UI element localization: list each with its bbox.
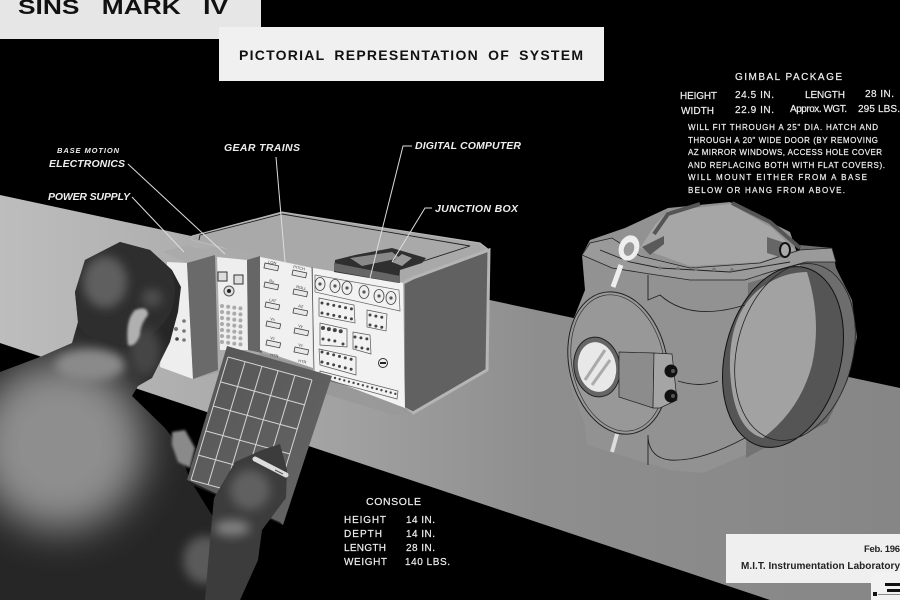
text block: console specifications: LENGTH: [344, 543, 386, 554]
ear: [127, 308, 148, 346]
text block: console specifications: 140 LBS.: [405, 557, 450, 568]
dial row: [315, 275, 400, 311]
panel: date and laboratory plate: M.I.T. Instrumentation Laboratory: [741, 561, 900, 572]
floor band: [0, 195, 900, 600]
logo badge: [871, 572, 900, 600]
clipboard with grid: [187, 346, 332, 525]
right side back rim: [790, 245, 857, 440]
shaded side faces: [746, 268, 806, 458]
label: gear trains: GEAR TRAINS: [224, 142, 300, 154]
text block: console specifications: [344, 496, 450, 568]
pen: [255, 459, 286, 475]
text block: console specifications: CONSOLE: [366, 496, 421, 508]
text block: gimbal package specifications: THROUGH A 20" WIDE DOOR (BY REMOVING: [688, 136, 878, 145]
text block: console specifications: 14 IN.: [406, 515, 435, 526]
text block: gimbal package specifications: 295 LBS.: [858, 104, 900, 115]
label: power supply: POWER SUPPLY: [48, 191, 131, 203]
lower cable: [612, 434, 617, 452]
gear trains panel: AZ: [298, 303, 304, 309]
gear trains panel: [260, 257, 313, 368]
text block: gimbal package specifications: LENGTH: [805, 90, 845, 101]
panel: date and laboratory plate: [726, 534, 900, 600]
panel: SINS Mark IV title plate: [0, 0, 261, 39]
gear trains panel: Rx: [269, 278, 275, 284]
gimbal body: [568, 202, 806, 473]
text block: gimbal package specifications: WILL MOUNT EITHER FROM A BASE: [688, 173, 867, 182]
digital computer panel: [312, 267, 405, 408]
leader lines: [128, 146, 432, 278]
operator hands and pen: [172, 430, 300, 600]
window: [569, 333, 625, 401]
text block: gimbal package specifications: WILL FIT THROUGH A 25" DIA. HATCH AND: [688, 123, 878, 132]
power supply module: [160, 245, 218, 379]
top collar: [582, 203, 836, 287]
round access plate: [555, 282, 681, 444]
gimbal package: [555, 202, 873, 473]
text block: gimbal package specifications: 22.9 IN.: [735, 105, 774, 116]
text block: gimbal package specifications: HEIGHT: [680, 91, 717, 102]
gear trains panel: HTR: [270, 352, 279, 359]
label: junction box: JUNCTION BOX: [435, 203, 519, 215]
label: base motion electronics: ELECTRONICS: [49, 158, 125, 170]
top surface of console: [192, 212, 489, 283]
base skirt: [190, 353, 413, 415]
operator figure: [0, 235, 270, 600]
gear trains panel: Vz: [270, 335, 275, 341]
label: base motion electronics: [49, 146, 125, 170]
side port: [767, 237, 785, 258]
text block: console specifications: WEIGHT: [344, 557, 387, 568]
text block: gimbal package specifications: 24.5 IN.: [735, 90, 774, 101]
heading: pictorial representation of system: [219, 27, 604, 81]
text block: gimbal package specifications: WIDTH: [681, 106, 714, 117]
gear trains panel: LAT: [269, 297, 277, 304]
writing hand and forearm: [205, 444, 287, 600]
gear trains panel: LON: [268, 259, 277, 266]
base motion electronics module: [194, 248, 262, 353]
large side cover: [704, 251, 873, 460]
text block: console specifications: HEIGHT: [344, 515, 386, 526]
gear trains panel: PITCH: [293, 264, 306, 271]
text block: gimbal package specifications: [680, 72, 900, 195]
label: base motion electronics: BASE MOTION: [57, 146, 120, 155]
gear trains panel: ROLL: [296, 284, 308, 291]
text block: console specifications: DEPTH: [344, 529, 382, 540]
text block: gimbal package specifications: BELOW OR HANG FROM ABOVE.: [688, 186, 845, 195]
curved seams: [648, 275, 745, 312]
dome: [640, 204, 795, 266]
text block: console specifications: 14 IN.: [406, 529, 435, 540]
sight ring: [615, 232, 643, 264]
gear trains panel: Vz: [298, 342, 303, 348]
heading: pictorial representation of system: PICTORIAL REPRESENTATION OF SYSTEM: [239, 47, 583, 63]
panel: date and laboratory plate: Feb. 196: [864, 544, 900, 555]
operator body and head: [0, 235, 270, 600]
gear trains panel: Vx: [270, 316, 275, 322]
sensor box with lenses: [619, 352, 678, 408]
text block: gimbal package specifications: AZ MIRROR WINDOWS, ACCESS HOLE COVER: [688, 148, 882, 157]
gear trains panel: HTR: [298, 358, 307, 365]
text block: gimbal package specifications: Approx. WGT.: [790, 104, 847, 115]
gear trains panel: Vy: [298, 323, 303, 329]
right side of console: [403, 250, 489, 413]
text block: gimbal package specifications: 28 IN.: [865, 89, 894, 100]
junction box: [334, 248, 426, 283]
text block: gimbal package specifications: AND REPLACING BOTH WITH FLAT COVERS).: [688, 161, 885, 170]
text block: console specifications: 28 IN.: [406, 543, 435, 554]
switch groups: [319, 298, 398, 399]
console unit: [160, 212, 489, 415]
label: digital computer: DIGITAL COMPUTER: [415, 140, 521, 152]
left hand: [172, 430, 195, 468]
text block: gimbal package specifications: GIMBAL PACKAGE: [735, 72, 842, 83]
collar bolts: [660, 268, 735, 270]
